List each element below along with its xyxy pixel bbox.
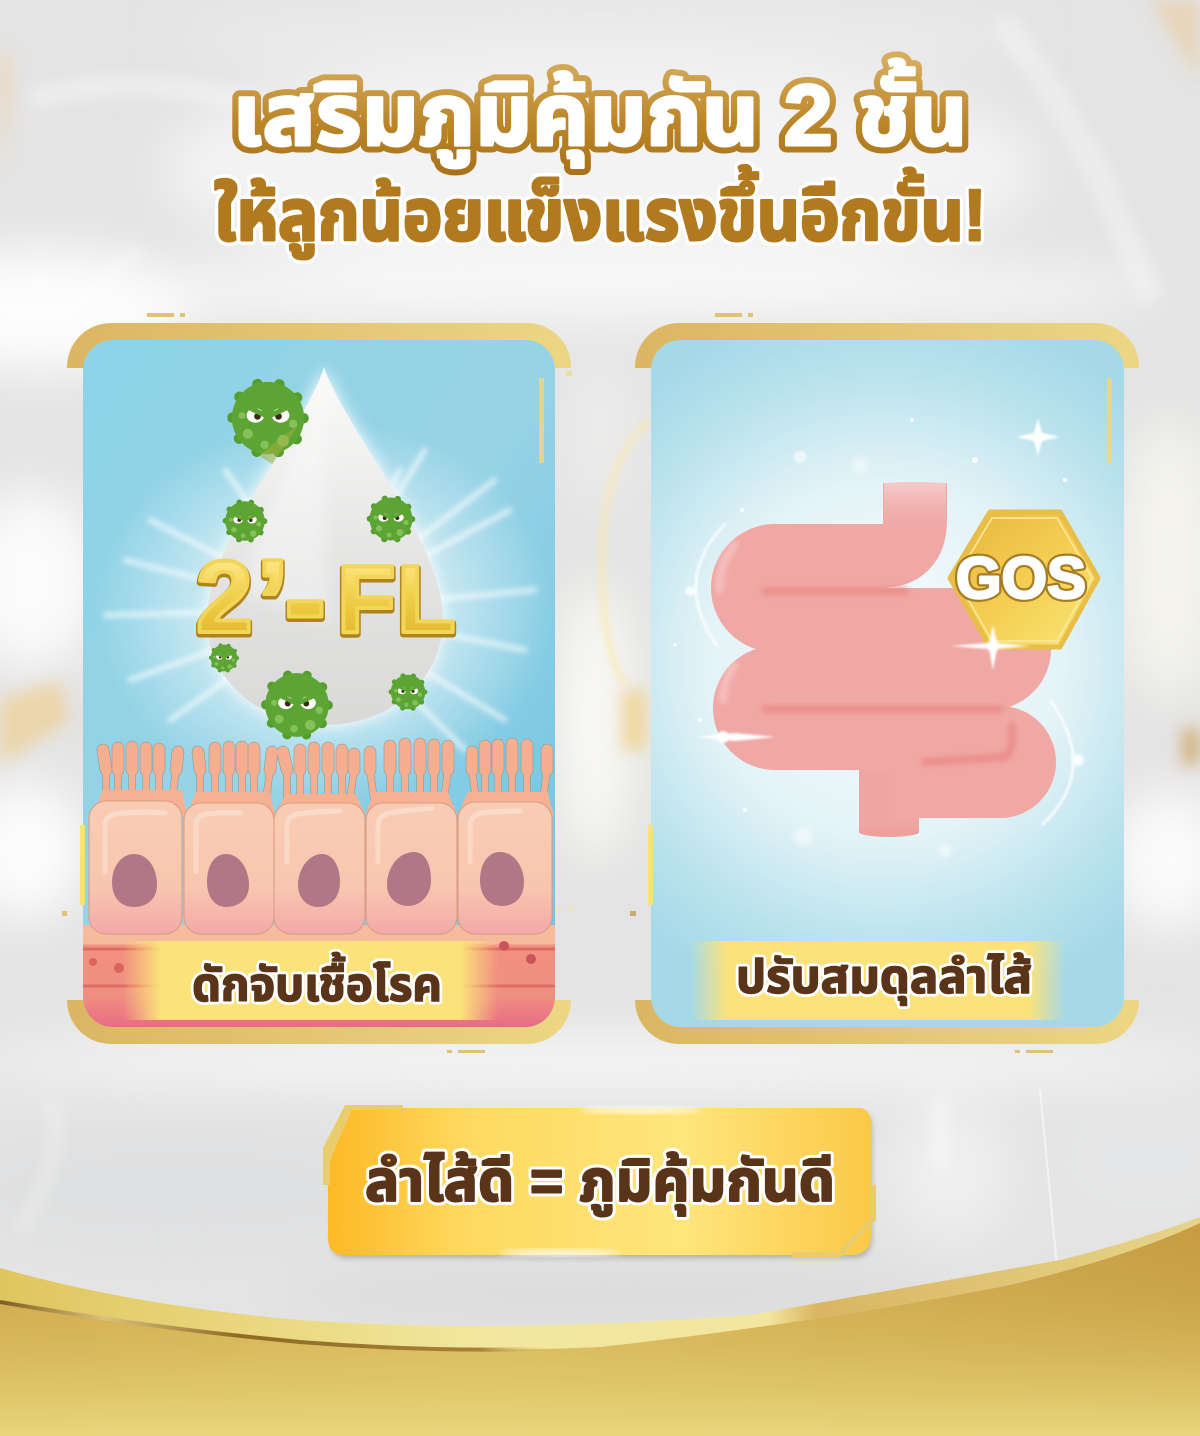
2'-FL label: 2	[196, 542, 253, 656]
panel: right card GOS	[630, 313, 1139, 1053]
2'-FL label: -	[284, 527, 327, 670]
virus small	[211, 645, 237, 671]
virus large top	[232, 382, 304, 464]
label: trap pathogens: ดักจับเชื้อโรค	[192, 952, 442, 1011]
label: balance gut: ปรับสมดุลลำไส้	[736, 950, 1032, 1005]
virus left	[225, 501, 265, 541]
label: trap pathogens	[123, 941, 498, 1020]
2'-FL label: ’	[256, 535, 289, 669]
cell 2	[184, 803, 274, 934]
cell 5	[458, 802, 552, 934]
callout button	[323, 1105, 876, 1258]
epithelial tissue	[83, 744, 555, 1027]
label: trap pathogens: ดักจับเชื้อโรค	[192, 952, 442, 1011]
cell 4	[366, 803, 457, 934]
cell 1	[89, 801, 182, 934]
2'-FL label: F	[337, 546, 396, 653]
card frame	[630, 313, 1139, 1053]
GOS hexagon badge	[950, 512, 1098, 670]
card frame	[62, 313, 573, 1053]
2'-FL label: L	[397, 548, 456, 655]
card background	[83, 340, 555, 1027]
energy arcs	[685, 523, 1084, 825]
microvilli	[103, 744, 547, 800]
callout text: ลำไส้ดี = ภูมิคุ้มกันดี	[365, 1149, 835, 1217]
virus bottom right	[391, 675, 425, 709]
GOS text: GOS	[956, 546, 1086, 611]
card background	[651, 340, 1124, 1027]
virus bottom	[265, 673, 329, 737]
title line 1: เสริมภูมิคุ้มกัน 2 ชั้น	[232, 58, 968, 168]
intestine	[695, 482, 1024, 837]
title	[214, 58, 986, 259]
title line 2: ให้ลูกน้อยแข็งแรงขึ้นอีกขั้น!	[214, 165, 986, 259]
bottom gold band	[0, 1217, 1200, 1436]
2'-FL label: L	[397, 546, 456, 653]
panel: left card 2'-FL	[62, 313, 573, 1053]
sparkles	[674, 418, 1067, 857]
2'-FL label	[196, 527, 456, 672]
virus right	[370, 498, 412, 540]
label: balance gut: ปรับสมดุลลำไส้	[736, 950, 1032, 1005]
label: balance gut	[690, 941, 1066, 1020]
callout text: ลำไส้ดี = ภูมิคุ้มกันดี	[365, 1149, 835, 1217]
cell 3	[274, 803, 365, 934]
2'-FL label: ’	[256, 537, 289, 671]
title line 1: เสริมภูมิคุ้มกัน 2 ชั้น	[232, 58, 968, 168]
2'-FL label: -	[284, 529, 327, 672]
2'-FL label: F	[337, 548, 396, 655]
2'-FL label: 2	[196, 540, 253, 654]
milk drop with rays	[95, 367, 555, 800]
gold ribbon	[0, 1217, 1200, 1350]
GOS text: GOS	[956, 546, 1086, 611]
title line 2: ให้ลูกน้อยแข็งแรงขึ้นอีกขั้น!	[214, 165, 986, 259]
